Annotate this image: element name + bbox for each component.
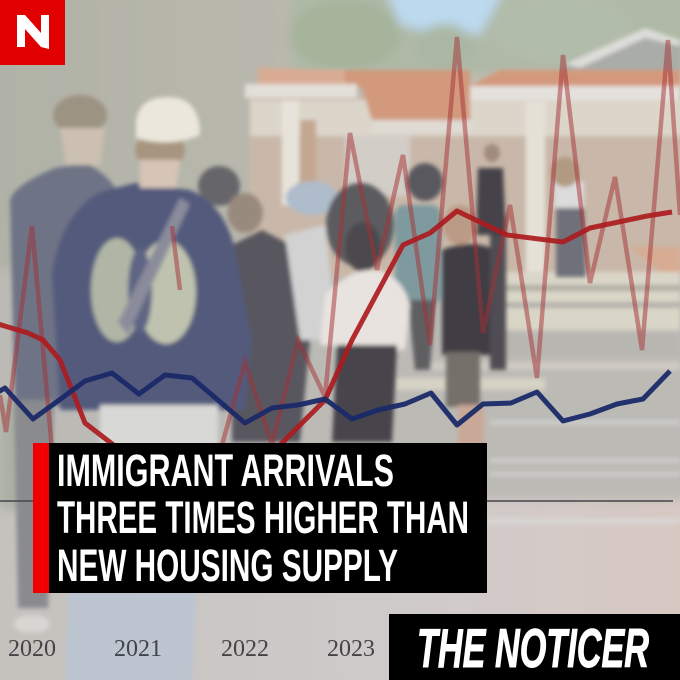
chart x-axis year labels: 2020 [8, 636, 56, 662]
chart x-axis year labels: 2022 [221, 636, 269, 662]
chart x-axis year labels: 2023 [327, 636, 375, 662]
left man [10, 163, 117, 410]
chart x-axis year labels: 2021 [114, 636, 162, 662]
woman at back [556, 205, 586, 277]
headline banner: THREE TIMES HIGHER THAN [57, 492, 469, 543]
chart axis line [0, 500, 673, 502]
headline banner: IMMIGRANT ARRIVALS [57, 445, 394, 496]
headline banner: NEW HOUSING SUPPLY [57, 540, 398, 591]
centre queue [395, 205, 441, 305]
chart: thick red line [0, 211, 672, 460]
chart: navy line [0, 371, 670, 425]
chart x-axis year labels [8, 636, 375, 662]
headline banner [33, 443, 487, 593]
dark people behind [232, 230, 310, 442]
logo: red N badge [0, 0, 65, 65]
chart: thin red immigrant arrivals line [0, 37, 680, 450]
cap man [52, 183, 252, 410]
